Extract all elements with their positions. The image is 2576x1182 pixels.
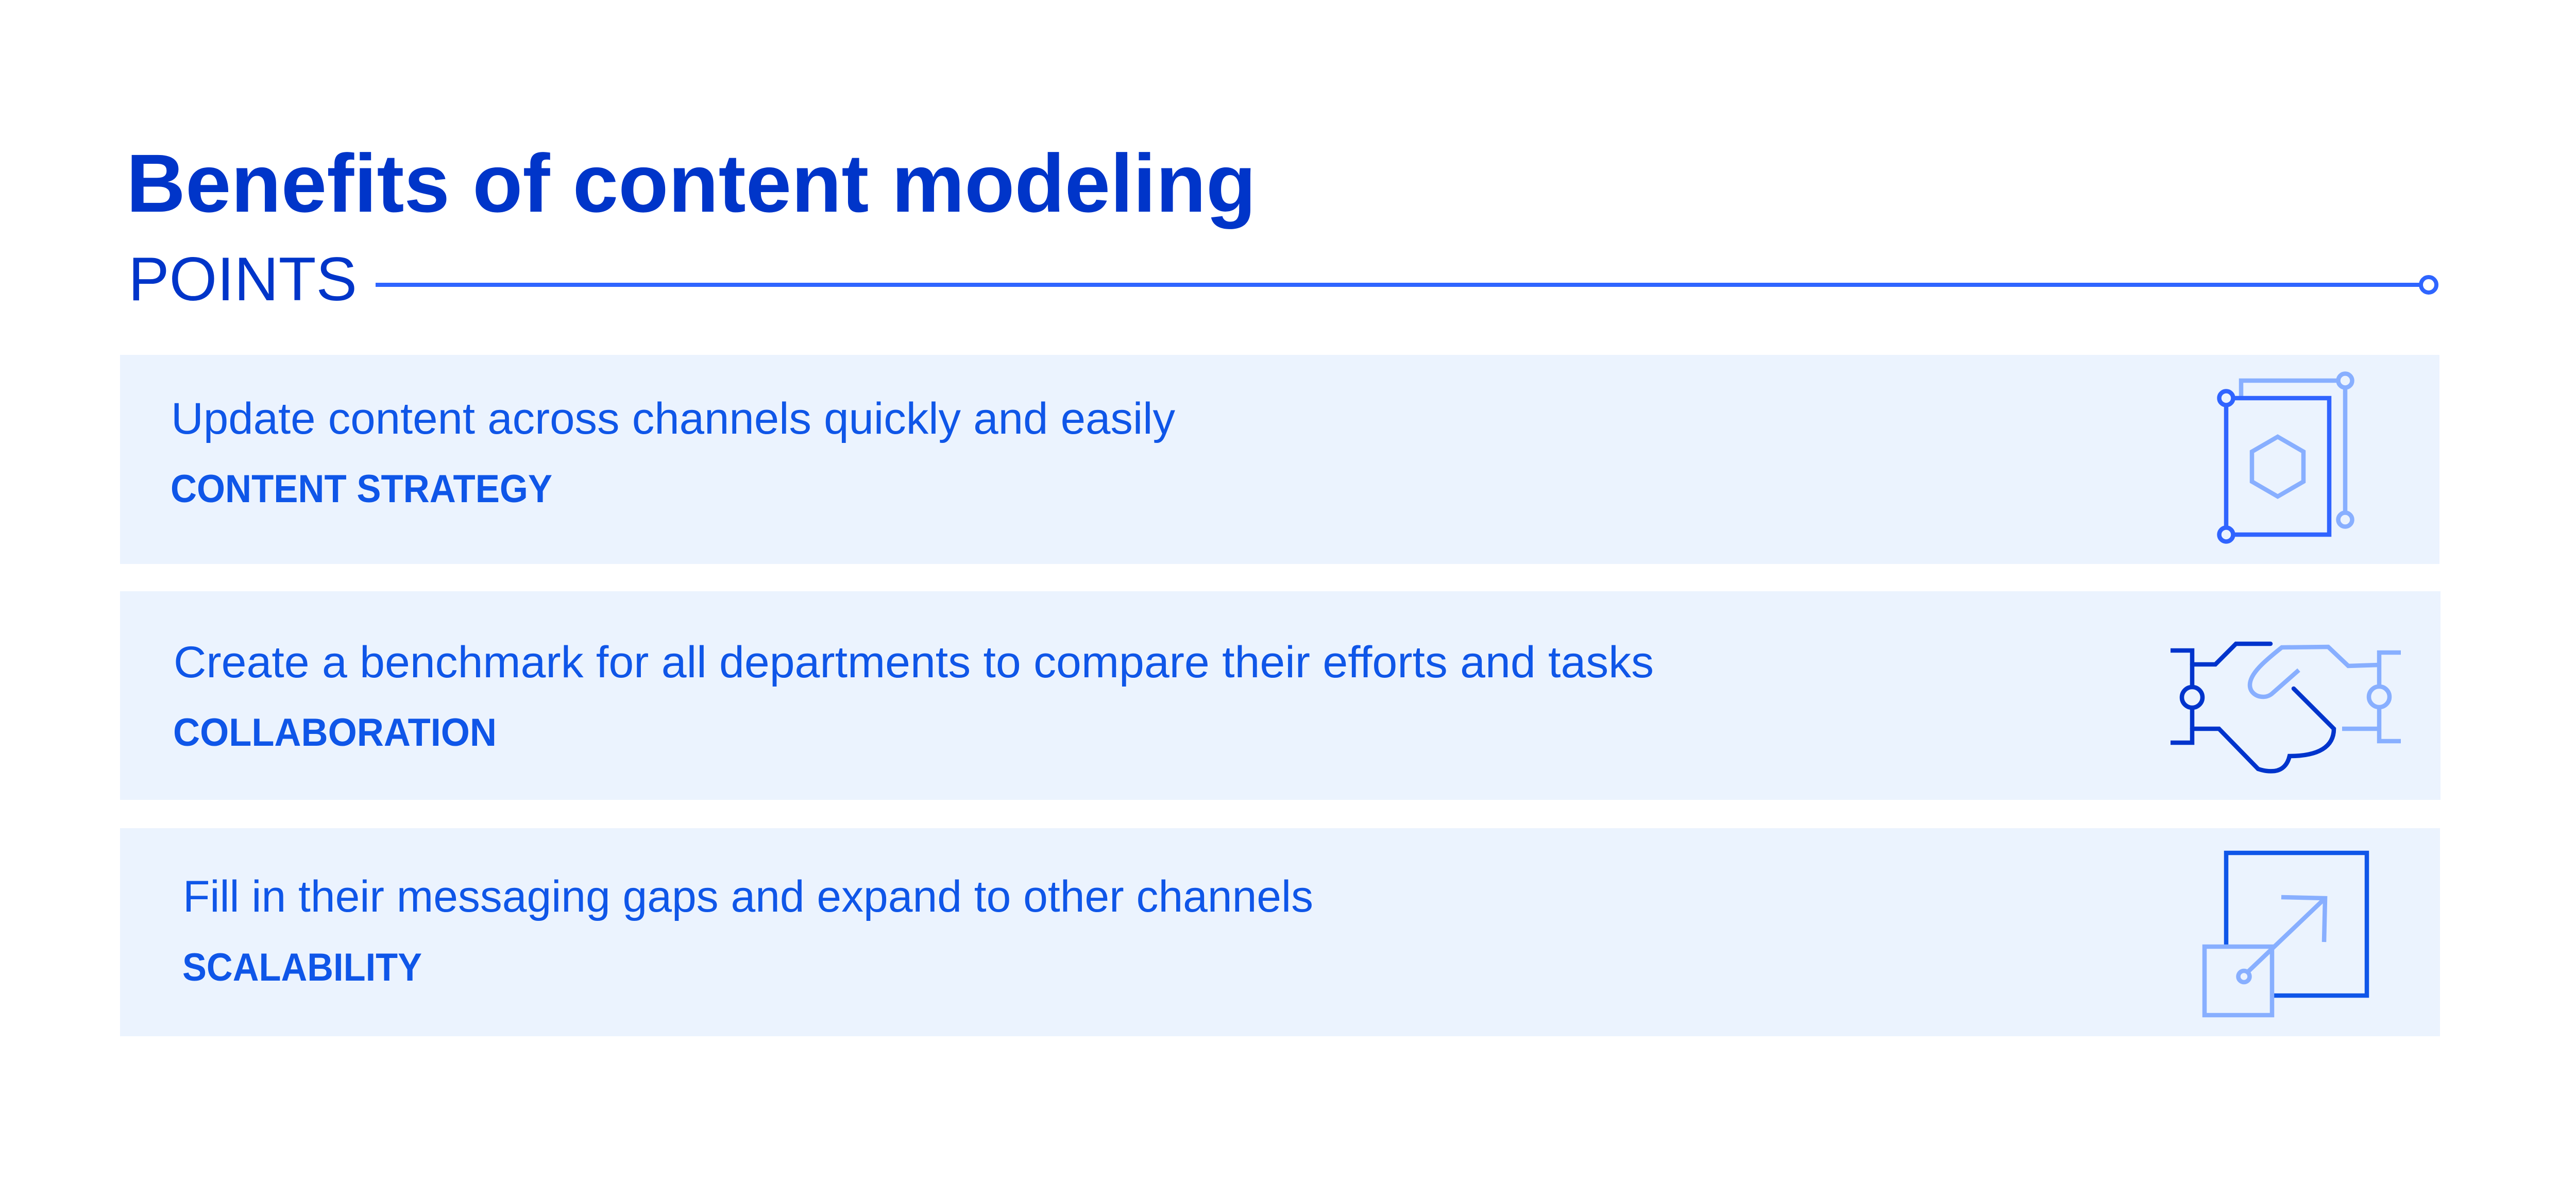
icon: handshake [2171,644,2401,771]
point text: update content: Update content across channels quickly and easily [171,394,1175,443]
header rule with end marker [376,277,2436,293]
subheading: points: POINTS [128,245,357,314]
point text: create a benchmark: Create a benchmark for all departments to compare their efforts and tasks [174,638,1654,687]
label: content strategy: CONTENT STRATEGY [171,467,552,511]
panel: content strategy [120,355,2439,564]
point text: fill in messaging gaps: Fill in their messaging gaps and expand to other channels [183,872,1313,921]
title: Benefits of content modeling [126,137,1256,229]
panel: collaboration [120,591,2441,800]
icon: document with hexagon [2219,374,2352,542]
label: collaboration: COLLABORATION [173,711,497,755]
icon: scaling square with arrow [2205,853,2367,1015]
label: scalability: SCALABILITY [182,946,422,989]
panel: scalability [120,828,2440,1036]
